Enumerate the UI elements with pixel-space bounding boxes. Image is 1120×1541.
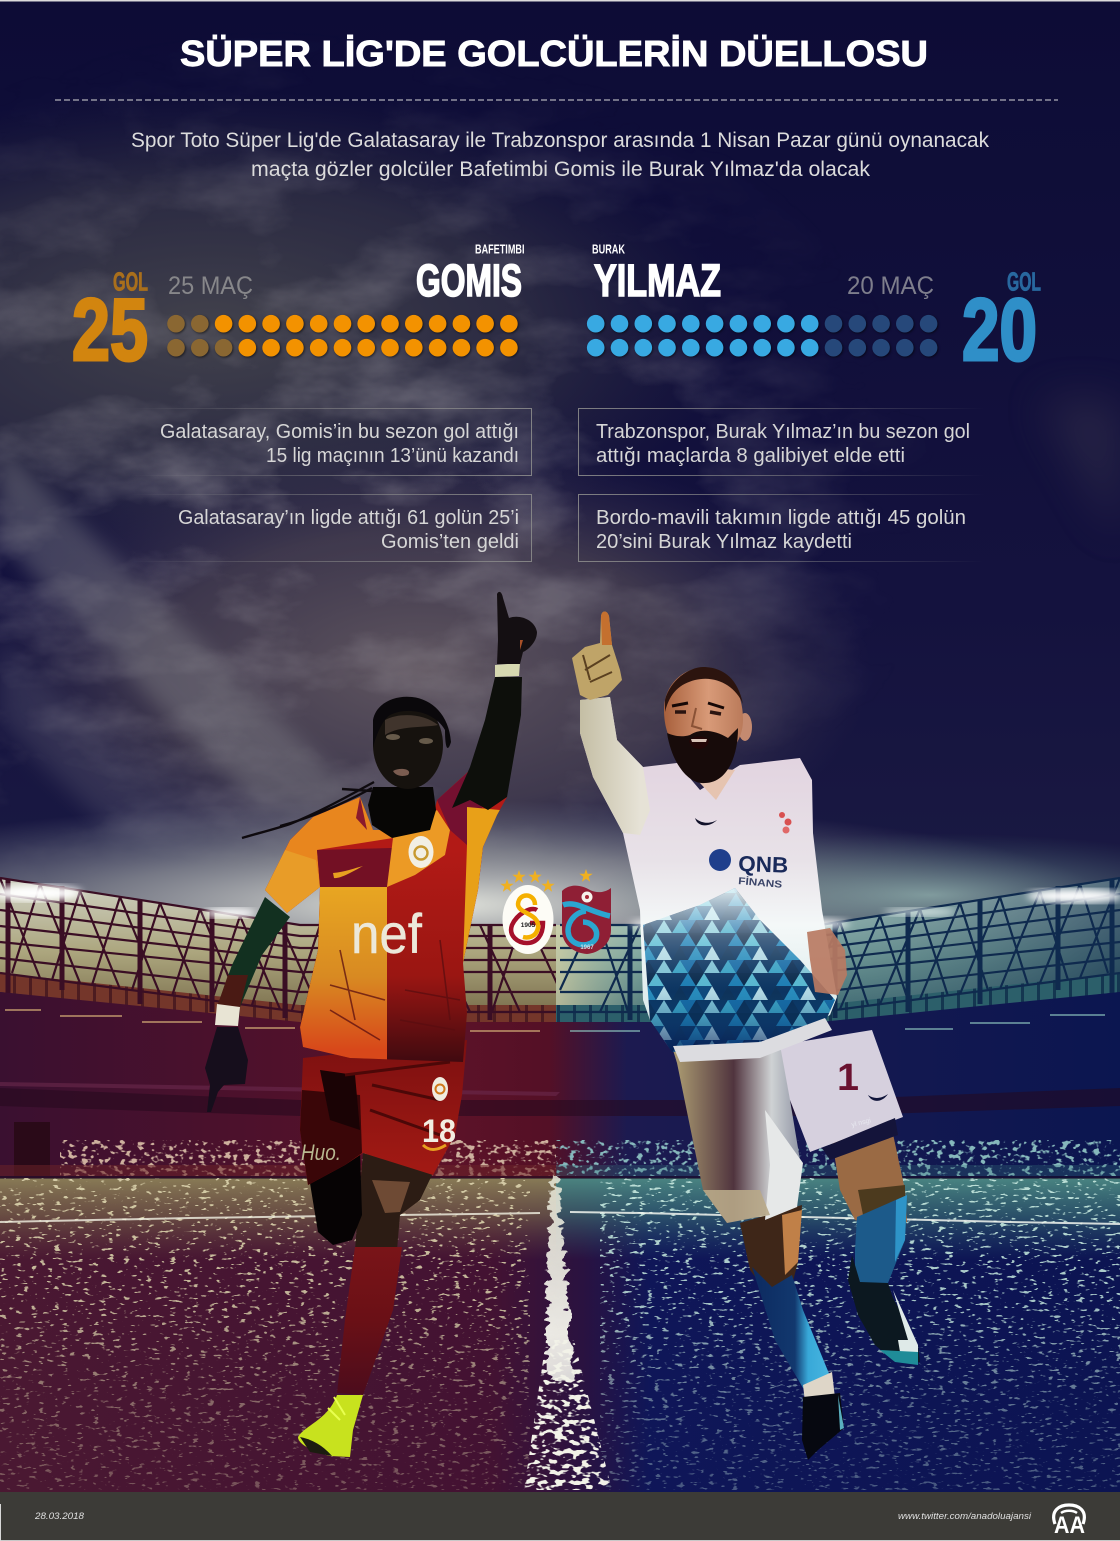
player: Yilmaz (572, 612, 920, 1460)
Gomis boot (298, 1395, 363, 1457)
Gomis shirt (260, 765, 510, 1065)
background: night sky with clouds (0, 108, 1120, 925)
panel: Gomis stats (72, 242, 524, 379)
icon: Anadolu Agency logo: AA (1054, 1512, 1085, 1539)
Gomis crest and nike mark (333, 836, 434, 878)
Gomis dots: matches scored (167, 315, 518, 357)
Gomis raised arm (452, 592, 537, 810)
Gomis sponsor nef: nef (351, 902, 422, 965)
Gomis left arm and glove (205, 897, 290, 1112)
Yilmaz match count: 20 MAÇ (847, 272, 934, 300)
stands (0, 992, 1120, 1180)
panel: Yilmaz fact one (578, 408, 985, 476)
panel: Yilmaz fact two: Bordo-mavili takımın ligde attığı 45 golün (596, 507, 966, 529)
Gomis shorts: 18 (422, 1113, 456, 1149)
Yilmaz raised fist (572, 612, 622, 700)
club crests (500, 869, 611, 954)
Yilmaz name: YILMAZ (594, 255, 721, 306)
Yilmaz goals count: 20 (962, 280, 1037, 379)
panel: Gomis fact one: Galatasaray, Gomis’in bu sezon gol attığı (160, 421, 519, 443)
Gomis dreadlocks (242, 782, 374, 838)
Gomis goals count: 25 (72, 280, 148, 379)
Yilmaz far leg (740, 1205, 844, 1460)
footer bar (0, 1492, 1120, 1541)
panel: Gomis fact two: Galatasaray’ın ligde attığı 61 golün 25’i (178, 507, 519, 529)
Gomis match count: 25 MAÇ (168, 272, 253, 300)
Yilmaz near leg (832, 1120, 920, 1365)
panel: Yilmaz fact two (578, 494, 985, 562)
Yilmaz shirt (580, 697, 837, 1050)
Gomis head (368, 697, 451, 838)
intro text: maçta gözler golcüler Bafetimbi Gomis ile Burak Yılmaz'da olacak (251, 158, 870, 181)
Yilmaz dots: matches scored (587, 315, 937, 357)
Yilmaz shirt badge and sponsor (695, 812, 792, 891)
Yilmaz shirt badge and sponsor: FİNANS (738, 874, 783, 891)
panel: Gomis fact two (130, 494, 532, 562)
Gomis legs (307, 1150, 433, 1395)
panel: Gomis fact two: Gomis’ten geldi (381, 531, 519, 553)
panel: Yilmaz fact one: Trabzonspor, Burak Yılmaz’ın bu sezon gol (596, 421, 970, 443)
Yilmaz shorts (673, 1030, 903, 1223)
Yilmaz name: BURAK (592, 242, 625, 256)
Yilmaz goals count: GOL (1007, 266, 1041, 296)
Yilmaz shorts: 1 (837, 1057, 859, 1099)
intro text: Spor Toto Süper Lig'de Galatasaray ile Trabzonspor arasında 1 Nisan Pazar günü oynanacak (131, 129, 989, 152)
Yilmaz shirt triangle pattern (640, 885, 840, 1055)
Yilmaz shirt badge and sponsor: QNB (738, 851, 789, 878)
panel: Yilmaz fact one: attığı maçlarda 8 galibiyet elde etti (596, 445, 905, 467)
Gomis goals count: GOL (113, 266, 148, 296)
pitch (0, 1176, 1120, 1492)
panel: Yilmaz stats (587, 242, 1041, 379)
panel: Gomis fact one (130, 408, 532, 476)
Gomis name: BAFETIMBI (475, 242, 524, 256)
Yilmaz head (664, 667, 752, 800)
panel: Yilmaz fact two: 20’sini Burak Yılmaz kaydetti (596, 531, 852, 553)
Galatasaray stars (500, 870, 555, 892)
Gomis shorts: Huo. (301, 1140, 341, 1165)
stadium roof trusses (0, 878, 1120, 1025)
Yilmaz name (592, 242, 721, 306)
Yilmaz sleeve (580, 697, 650, 835)
Galatasaray crest: 1905 (521, 922, 536, 929)
footer date: 28.03.2018 (34, 1511, 85, 1522)
Yilmaz shorts: yl nsgi (851, 1117, 872, 1129)
Gomis name (416, 242, 524, 306)
background: stadium roof and stands (0, 878, 1120, 1180)
Yilmaz hand on hip (807, 928, 847, 995)
header title: SÜPER LİG'DE GOLCÜLERİN DÜELLOSU (180, 33, 928, 74)
player: Gomis (205, 592, 537, 1457)
Gomis shorts (300, 1040, 467, 1185)
Yilmaz shirt hem (673, 1018, 832, 1062)
panel: Gomis fact one: 15 lig maçının 13’ünü kazandı (266, 445, 519, 467)
intro text (131, 129, 989, 181)
Gomis name: GOMIS (416, 255, 522, 306)
Trabzonspor crest: 1967 (580, 945, 594, 951)
footer twitter link: www.twitter.com/anadoluajansi (898, 1511, 1032, 1522)
